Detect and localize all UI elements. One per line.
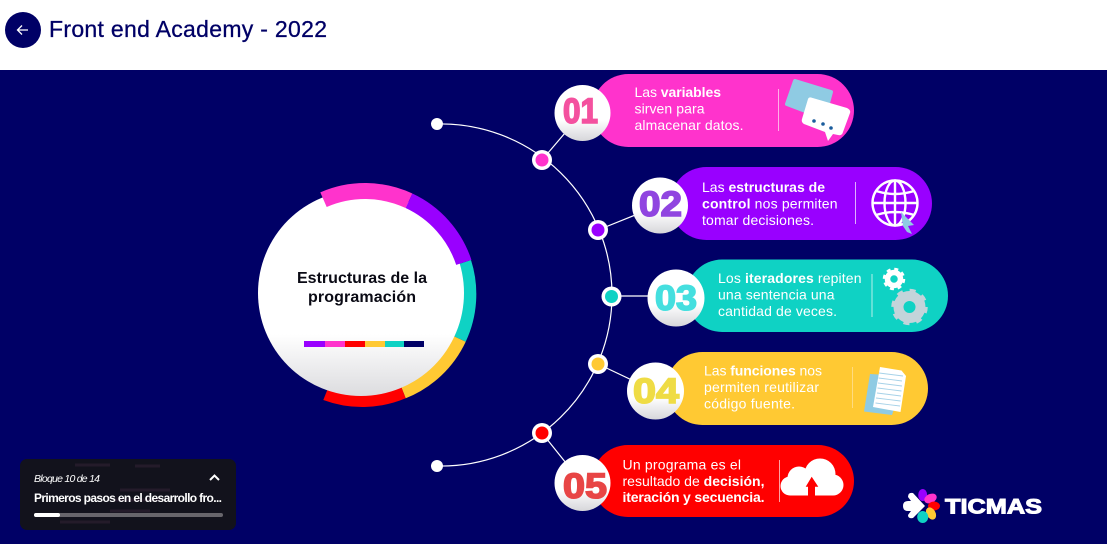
icon: gears (884, 269, 926, 324)
progress bar (34, 513, 223, 517)
logo wordmark: TICMAS (945, 496, 1042, 518)
item 01: variables: Las variables (634, 84, 721, 100)
item 01: variables: 01 (563, 92, 598, 131)
item 03: iteradores: cantidad de veces. (718, 303, 837, 319)
item 05: decision, iteracion y secuencia: 05 (563, 467, 607, 506)
item 05: decision, iteracion y secuencia: iteración y secuencia. (622, 489, 764, 505)
timeline arc with nodes (431, 113, 676, 483)
colour stripe (304, 341, 424, 347)
item 02: estructuras de control (632, 167, 932, 240)
item 04: funciones: 04 (633, 372, 680, 411)
icon: chat bubbles (787, 81, 850, 141)
item 04: funciones: permiten reutilizar (704, 379, 819, 395)
item 03: iteradores (648, 260, 948, 332)
page title: Front end Academy - 2022 (49, 16, 327, 42)
item 05: decision, iteracion y secuencia: Un programa es el (622, 456, 741, 472)
block counter: Bloque 10 de 14 (34, 473, 100, 485)
item 03: iteradores: una sentencia una (718, 286, 835, 302)
item 03: iteradores: 03 (655, 279, 697, 318)
item 04: funciones: código fuente. (704, 396, 795, 412)
item 02: estructuras de control: 02 (639, 185, 682, 224)
upper ring segments (324, 191, 464, 262)
item 02: estructuras de control: tomar decisiones. (702, 212, 814, 228)
item 01: variables: sirven para (634, 100, 705, 116)
central heading (297, 270, 427, 306)
item 04: funciones (627, 352, 928, 425)
item 01: variables: almacenar datos. (634, 117, 744, 133)
central circle with coloured ring (258, 190, 476, 407)
course name: Primeros pasos en el desarrollo fro... (34, 491, 222, 505)
chevron icon (210, 476, 219, 480)
item 05: decision, iteracion y secuencia: resultado de decisión, (622, 473, 764, 489)
item 05: decision, iteracion y secuencia (554, 445, 854, 517)
item 04: funciones: Las funciones nos (704, 362, 822, 378)
icon: cloud upload (780, 458, 844, 496)
item 02: estructuras de control: Las estructuras de (702, 179, 825, 195)
item 02: estructuras de control: control nos permiten (702, 196, 838, 212)
icon: globe with cursor (872, 180, 918, 234)
header bar (0, 0, 1107, 70)
item 01: variables (554, 74, 854, 147)
lower ring segments (323, 260, 476, 407)
central heading: Estructuras de la (297, 270, 427, 287)
TICMAS logo (903, 489, 1042, 523)
central heading: programación (308, 289, 416, 306)
icon: documents (864, 367, 906, 415)
logo mark (903, 489, 940, 523)
back button icon (5, 12, 41, 48)
course progress card (20, 459, 236, 530)
item 03: iteradores: Los iteradores repiten (718, 270, 862, 286)
